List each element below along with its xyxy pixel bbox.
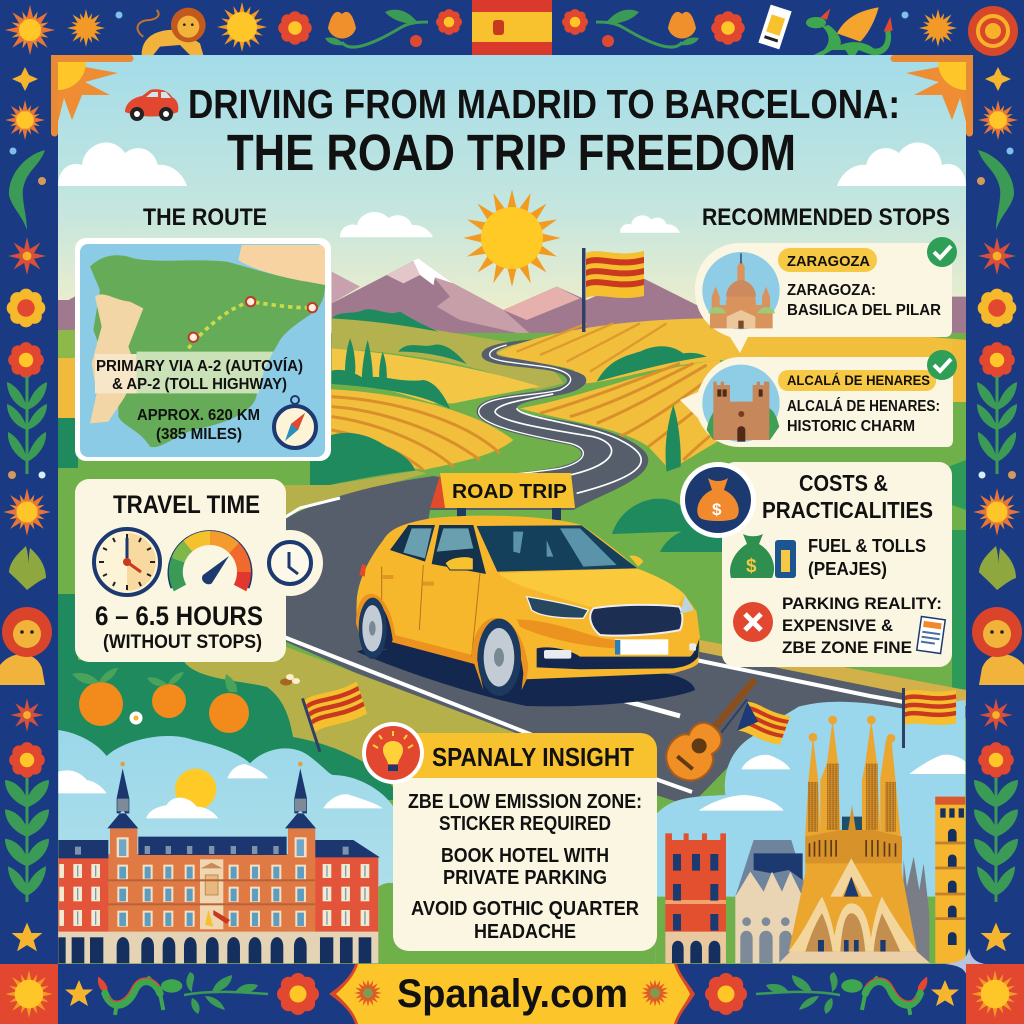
icon: gauge (169, 532, 251, 588)
sky (655, 700, 965, 963)
flower (436, 9, 462, 35)
star (981, 923, 1011, 951)
heading: recommended stops: RECOMMENDED STOPS (702, 204, 950, 231)
sun (175, 769, 216, 810)
star left (350, 975, 386, 1011)
heading: TRAVEL TIME (113, 491, 260, 519)
check (927, 237, 957, 267)
flower (978, 742, 1014, 778)
flower (9, 742, 45, 778)
branch (184, 972, 268, 1014)
pill text: ZARAGOZA (787, 253, 870, 270)
flower (562, 9, 588, 35)
footer banner (329, 964, 695, 1024)
time note: (WITHOUT STOPS) (103, 632, 262, 653)
flower (705, 973, 747, 1015)
icon: lion (138, 8, 206, 55)
stop description: BASILICA DEL PILAR (787, 302, 941, 319)
mountains (53, 258, 967, 347)
front wheel (478, 619, 521, 696)
time: 6 – 6.5 HOURS (95, 601, 263, 631)
sun (213, 0, 271, 56)
flower (10, 698, 44, 732)
icon: lion (0, 607, 52, 685)
icon: clock (94, 529, 160, 595)
route text: PRIMARY VIA A-2 (AUTOVÍA) (96, 356, 303, 375)
flower (979, 342, 1015, 378)
title line 1: DRIVING FROM MADRID TO BARCELONA: (188, 81, 900, 127)
flag on hill (582, 248, 644, 332)
icon: dragon (806, 7, 893, 55)
main road (282, 476, 966, 806)
olive verge (283, 471, 427, 517)
road trip sign (430, 473, 575, 520)
star (65, 980, 93, 1006)
corner sun: top right (890, 55, 973, 136)
parking text 2: EXPENSIVE & (782, 616, 893, 635)
wheel arches (356, 594, 528, 690)
hill right (378, 883, 400, 963)
rear wheel (359, 598, 387, 659)
icon: lion (972, 607, 1024, 685)
sun (2, 487, 52, 537)
side windows (390, 525, 486, 574)
route text 2: & AP-2 (TOLL HIGHWAY) (112, 376, 287, 393)
dot (116, 12, 122, 18)
distance km: APPROX. 620 KM (137, 407, 260, 424)
tulip and vine (596, 10, 699, 47)
peajes: (PEAJES) (808, 559, 887, 579)
icon: guitar (657, 664, 773, 790)
header (393, 733, 657, 778)
oranges (72, 668, 249, 733)
right upper field (497, 318, 967, 383)
stem (7, 376, 47, 474)
panel: travel time (75, 479, 323, 662)
lower intake (537, 638, 699, 669)
four point star (12, 67, 38, 91)
scene: Madrid Plaza Mayor (58, 730, 400, 963)
pill (778, 248, 877, 272)
scene: landscape (53, 55, 967, 973)
dots (978, 471, 1016, 479)
branch (756, 972, 840, 1014)
grey spires (902, 857, 929, 963)
icon: castle (702, 365, 780, 442)
flower (278, 11, 312, 45)
corner square (966, 964, 1024, 1024)
border: bottom right ornaments (705, 964, 1024, 1024)
cloud right (837, 142, 966, 186)
stem (974, 778, 1018, 902)
four point star (985, 67, 1011, 91)
ground (655, 897, 965, 963)
panel: Spanaly insight (362, 722, 657, 951)
yellow flower (978, 289, 1016, 327)
leaf pair (9, 546, 46, 590)
right hill bands (612, 340, 966, 706)
shadow (357, 640, 695, 706)
distance miles: (385 MILES) (156, 426, 242, 443)
tip 1: ZBE LOW EMISSION ZONE: (408, 791, 642, 813)
fields (283, 309, 967, 580)
check (927, 350, 957, 380)
middle yellow field (332, 348, 540, 403)
flag: Catalan right (902, 688, 956, 748)
bushes (310, 309, 707, 485)
corner sun medallion (968, 6, 1018, 56)
border: right ornaments (945, 67, 1024, 985)
flower (979, 698, 1013, 732)
flower (978, 237, 1016, 275)
leaf ornament (9, 148, 46, 230)
pill (778, 370, 936, 391)
sky (58, 730, 393, 963)
back olive field (332, 318, 563, 390)
site name: Spanaly.com (397, 972, 628, 1016)
panel: costs (680, 462, 952, 667)
right headlight (680, 595, 694, 614)
flower (8, 237, 46, 275)
scene: Barcelona (655, 700, 965, 963)
bee (280, 674, 300, 686)
icon: compass (274, 396, 316, 448)
car (356, 516, 700, 706)
tip 3: AVOID GOTHIC QUARTER (411, 898, 639, 920)
icon: fuel and money (730, 534, 796, 578)
sun (4, 4, 56, 56)
red tower (665, 833, 726, 963)
sky (58, 55, 966, 340)
door lines (382, 565, 480, 657)
corner square (0, 964, 58, 1024)
yellow tower (935, 797, 965, 963)
cloud centre (340, 212, 433, 237)
sun (977, 99, 1019, 141)
title (125, 81, 900, 181)
dot (902, 12, 908, 18)
icon: small clock (257, 530, 323, 596)
leaf ornament (977, 148, 1014, 230)
fuel text: FUEL & TOLLS (808, 536, 926, 556)
mirror (445, 557, 473, 570)
star sun (65, 7, 107, 49)
number plate (615, 639, 668, 655)
border: top ornaments (4, 0, 1018, 56)
icon: money bag badge (680, 462, 756, 538)
panel: route map (75, 238, 331, 461)
tip 2: BOOK HOTEL WITH (441, 845, 609, 867)
icon: toll ticket (758, 5, 792, 49)
tip 2b: PRIVATE PARKING (443, 867, 607, 889)
tip 3b: HEADACHE (474, 921, 576, 943)
hills base (58, 333, 966, 973)
clouds (699, 755, 965, 811)
heading: SPANALY INSIGHT (432, 742, 634, 772)
yellow flower (7, 289, 45, 327)
icon: dragon (841, 977, 927, 1015)
parking text 3: ZBE ZONE FINE (782, 638, 912, 657)
stop name: ALCALÁ DE HENARES: (787, 398, 940, 415)
sun (972, 487, 1022, 537)
stem (977, 376, 1017, 474)
border: bottom left ornaments (0, 964, 319, 1024)
star (931, 980, 959, 1006)
hill strip left (58, 300, 78, 674)
heading 2: PRACTICALITIES (762, 497, 933, 523)
body (393, 778, 657, 951)
star sun (917, 7, 959, 49)
Sagrada Familia (779, 716, 930, 963)
map shapes (90, 245, 325, 447)
cloud small (620, 215, 680, 233)
icon: red car (125, 89, 178, 121)
border: left ornaments (0, 67, 52, 951)
gothic building (735, 840, 805, 963)
winding road (320, 339, 648, 580)
sign text: ROAD TRIP (452, 481, 567, 503)
icon: fuel and money: $ (746, 556, 757, 577)
icon: light bulb (362, 722, 424, 784)
heading: COSTS & (799, 470, 888, 496)
building (58, 762, 380, 963)
star right (637, 975, 673, 1011)
stop name: ZARAGOZA: (787, 282, 876, 299)
stop description: HISTORIC CHARM (787, 418, 915, 435)
dots (8, 471, 46, 479)
lower panel (388, 619, 615, 665)
icon: money bag badge: $ (712, 500, 722, 519)
panel: stop Zaragoza (695, 237, 957, 353)
icon: basilica (702, 252, 780, 329)
door handles (383, 575, 434, 586)
leaf pair (979, 546, 1016, 590)
sun (4, 99, 46, 141)
flower (711, 11, 745, 45)
rear light (359, 564, 366, 577)
icon: dragon (98, 977, 182, 1015)
hood (498, 568, 685, 607)
tip 1b: STICKER REQUIRED (439, 813, 611, 835)
flower (277, 973, 319, 1015)
left striped field (310, 388, 513, 470)
star (12, 923, 42, 951)
flag: Catalan left (301, 681, 374, 752)
sparkle (945, 948, 985, 985)
icon: fine ticket (917, 616, 945, 654)
headlight (527, 597, 588, 618)
grille (590, 605, 682, 636)
pill text: ALCALÁ DE HENARES (787, 372, 930, 388)
icon: red cross (733, 602, 773, 642)
stem (5, 778, 49, 902)
panel: stop Alcalá (680, 350, 957, 447)
heading: the route: THE ROUTE (143, 204, 267, 231)
trees (345, 338, 681, 472)
flower (8, 342, 44, 378)
icon: Spain flag (472, 0, 552, 55)
body (356, 516, 700, 679)
cloud left (58, 142, 187, 186)
title line 2: THE ROAD TRIP FREEDOM (227, 124, 796, 181)
right mirror (629, 555, 643, 567)
corner sun: top left (51, 55, 134, 136)
lower ground left (58, 646, 560, 800)
parking text: PARKING REALITY: (782, 594, 942, 613)
flag: estelada (720, 694, 791, 753)
windshield (477, 525, 637, 572)
clouds (58, 764, 383, 818)
right lower field (520, 360, 720, 470)
sun (448, 174, 576, 302)
tulip and vine (325, 10, 428, 47)
